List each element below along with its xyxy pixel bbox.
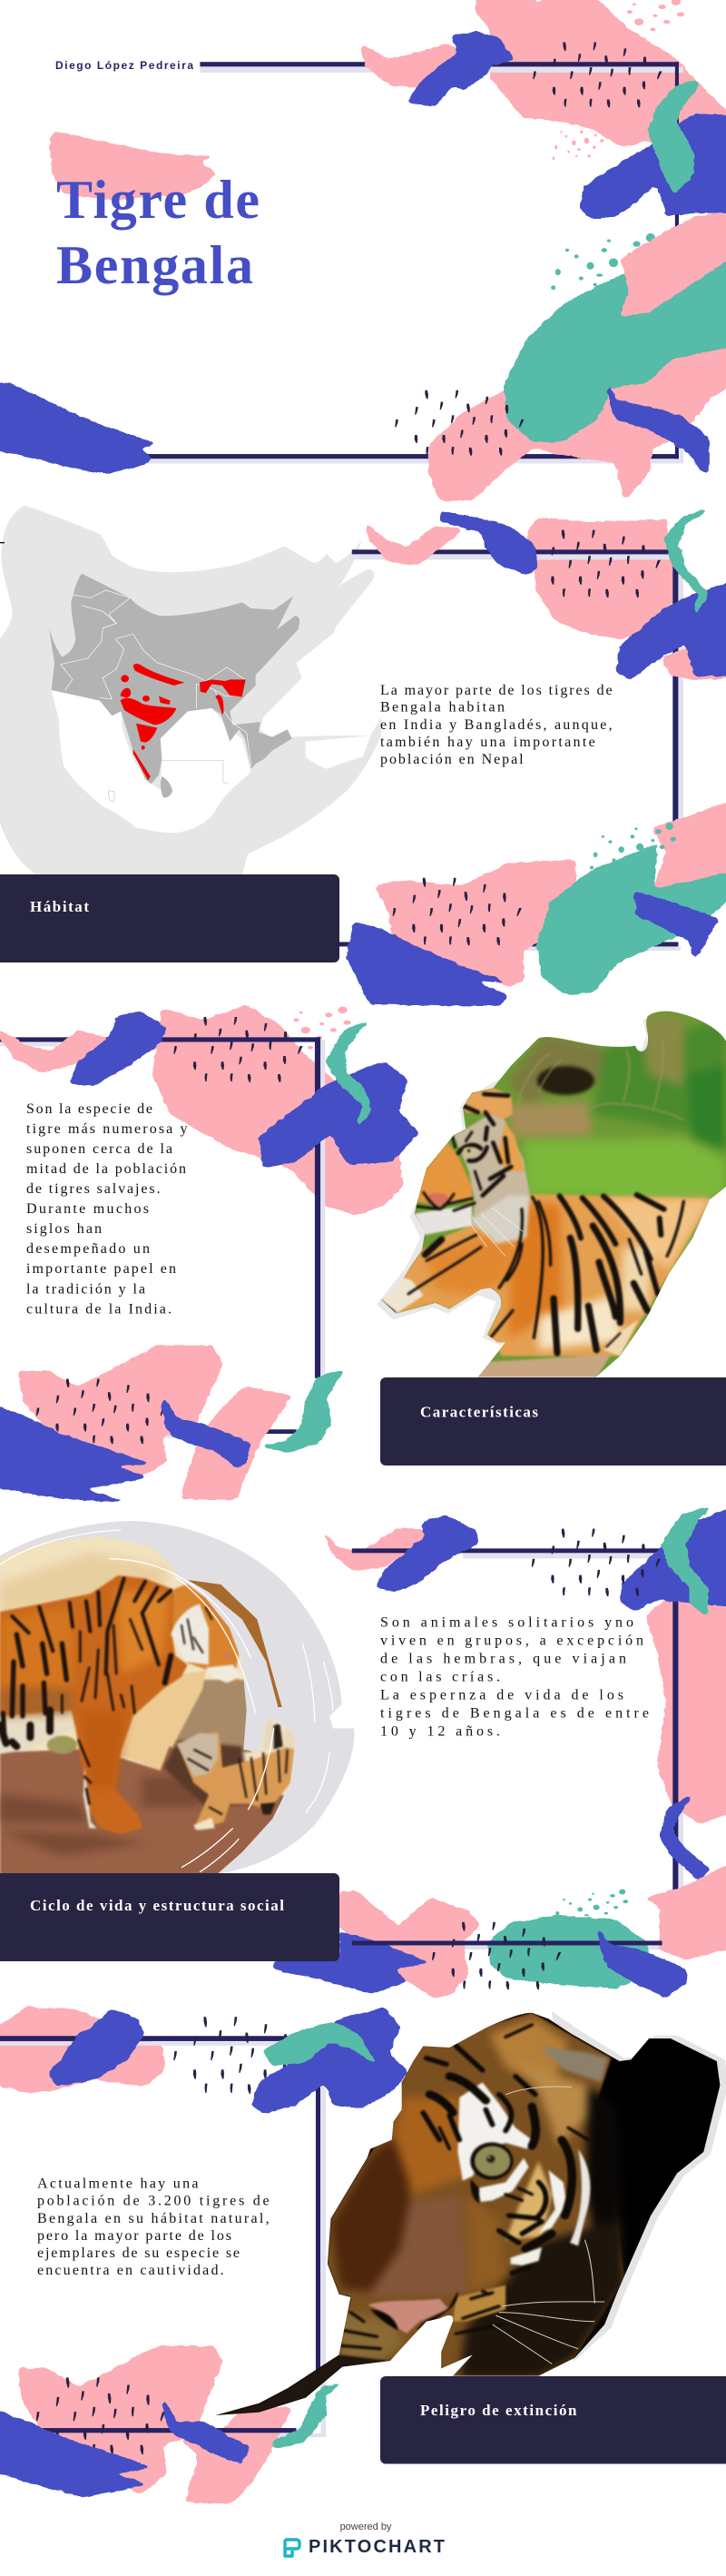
brush: blue tail <box>606 372 709 472</box>
author name: Diego López Pedreira <box>55 59 193 72</box>
brush: green large <box>505 241 726 442</box>
text: life cycle: 10 y 12 años. <box>380 1723 500 1739</box>
footer: powered by: powered by <box>340 2522 392 2532</box>
brush: blue bottom left <box>348 922 512 1006</box>
frame: lines <box>0 2036 326 2437</box>
text: characteristics: importante papel en <box>26 1261 176 1277</box>
brush: pink right <box>646 1586 726 1823</box>
brush: swirl pink <box>360 44 467 87</box>
brush: blue bottom left <box>0 383 157 474</box>
brush: blue tail <box>630 866 718 961</box>
text: life cycle: de las hembras, que viajan <box>380 1651 626 1666</box>
text: characteristics: tigre más numerosa y <box>26 1121 188 1137</box>
text: life cycle: tigres de Bengala es de entre <box>380 1705 649 1721</box>
map: sri lanka <box>161 776 172 798</box>
map: thin maritime lines <box>108 760 229 802</box>
photo shadow <box>539 2011 726 2361</box>
photo: tigress and cub <box>0 1516 354 1880</box>
brush: blue cross <box>260 1061 419 1168</box>
brush: green swirl <box>261 2021 378 2068</box>
pattern: ticks bottom <box>395 390 525 456</box>
photo content <box>0 1516 302 1880</box>
brush: pink lower right <box>181 1387 291 1499</box>
text: characteristics: la tradición y la <box>26 1282 145 1297</box>
frame: bottom line <box>42 2428 297 2433</box>
text: characteristics: de tigres salvajes. <box>26 1181 160 1197</box>
map: tiger range red <box>121 664 246 780</box>
heading box: life cycle <box>0 1873 339 1961</box>
frame: top line <box>200 62 683 231</box>
brush: green <box>260 1369 345 1452</box>
brush: pink top left <box>0 2007 164 2093</box>
brush: green over tusk <box>273 2381 345 2450</box>
brush: pink top <box>528 518 676 639</box>
brush: blue left <box>273 1931 430 1993</box>
text: characteristics: desempeñado un <box>26 1241 150 1257</box>
pattern: ticks top <box>173 1017 303 1082</box>
text: life cycle: Son animales solitarios yno <box>380 1614 633 1631</box>
brush: white streaks <box>0 1530 333 1872</box>
brush: pink bottom <box>339 1891 479 1998</box>
photo content <box>209 2007 726 2431</box>
brush: green stroke <box>662 1505 713 1617</box>
text: life cycle <box>380 1614 649 1739</box>
brush: blue bottom left <box>0 2407 152 2497</box>
map: light surrounding land <box>0 506 381 874</box>
panel: life cycle <box>273 1505 726 1998</box>
brush: swirl pink <box>365 521 463 565</box>
text: endangered: ejemplares de su especie se <box>37 2245 240 2261</box>
splatter: green <box>551 233 659 290</box>
brush: swirl pink <box>0 1029 111 1072</box>
pattern: ticks bottom <box>36 1378 165 1444</box>
map: dark land <box>49 574 299 784</box>
brush: pink top right <box>477 0 726 166</box>
frame: lines <box>0 1037 325 1438</box>
text: habitat: Bengala habitan <box>380 699 505 716</box>
splatter: pink <box>243 1007 351 1051</box>
brush: pink right <box>652 796 726 895</box>
brush: blue cross <box>616 577 726 680</box>
brush: pink over green <box>621 212 726 316</box>
text: life cycle: con las crías. <box>380 1669 500 1684</box>
brush: blue tail <box>162 1393 250 1468</box>
brush: blue tail <box>162 2394 250 2464</box>
heading box: endangered <box>380 2376 726 2464</box>
brush: swirl blue <box>70 1012 167 1086</box>
text: characteristics: suponen cerca de la <box>26 1141 172 1157</box>
brush: pink behind cross <box>662 620 726 680</box>
brush: blue <box>440 511 537 575</box>
brush: green large <box>537 844 726 994</box>
heading box: habitat <box>0 874 339 962</box>
brush: swirl blue <box>407 31 514 106</box>
text: endangered: Actualmente hay una <box>37 2176 198 2192</box>
text: endangered: pero la mayor parte de los <box>37 2228 231 2244</box>
text: habitat: La mayor parte de los tigres de <box>380 683 613 698</box>
brush: pink lower <box>18 1346 222 1477</box>
text: habitat: población en Nepal <box>380 752 524 767</box>
brush: pink bottom right <box>646 1859 726 1959</box>
text: habitat <box>380 683 613 767</box>
heading box: endangered: Peligro de extinción <box>420 2402 577 2419</box>
photo: tiger face close-up <box>209 2007 726 2431</box>
photo: tiger resting on grass <box>375 1002 726 1383</box>
footer: piktochart wordmark: PIKTOCHART <box>309 2537 445 2557</box>
icon: piktochart logo <box>285 2540 299 2556</box>
brush: title pink <box>50 132 218 200</box>
brush: blue bottom left <box>0 1402 152 1502</box>
photo content <box>375 1002 726 1383</box>
brush: tiger sliver beyond arc <box>188 1580 282 1707</box>
heading box: habitat: Hábitat <box>30 898 89 915</box>
brush: blue tail <box>597 1920 688 1998</box>
frame: bottom line <box>339 942 681 951</box>
pattern: ticks bottom <box>393 878 522 945</box>
text: characteristics: cultura de la India. <box>26 1302 172 1317</box>
heading box: characteristics <box>380 1377 726 1466</box>
frame: bottom line <box>352 1940 662 1945</box>
text: characteristics: Durante muchos <box>26 1201 149 1217</box>
pattern: ticks bottom <box>432 1922 561 1989</box>
title: Bengala <box>56 235 253 295</box>
brush: pink lower <box>18 2346 222 2493</box>
text: characteristics: siglos han <box>26 1221 102 1237</box>
heading box: characteristics: Características <box>420 1404 538 1420</box>
pattern: ticks top <box>532 530 661 597</box>
panel: endangered <box>0 2007 407 2502</box>
brush: pink lower right <box>428 312 726 500</box>
text: habitat: en India y Bangladés, aunque, <box>380 717 613 733</box>
text: characteristics <box>26 1101 188 1317</box>
frame: lines <box>352 1548 683 1949</box>
brush: pink lower right <box>181 2407 291 2502</box>
brush: green stroke <box>648 80 699 195</box>
pattern: ticks top <box>533 42 662 107</box>
splatter: green <box>590 823 676 870</box>
frame: right line <box>672 1584 678 1893</box>
splatter: pink lower <box>553 120 612 160</box>
pattern: ticks bottom <box>36 2377 165 2454</box>
text: life cycle: La espernza de vida de los <box>380 1687 623 1703</box>
map: small tick <box>0 542 5 543</box>
frame: bottom line <box>139 344 683 463</box>
splatter: pink <box>576 0 684 44</box>
brush: green oval <box>488 1916 648 1989</box>
title: Tigre de <box>56 170 260 230</box>
pattern: ticks top <box>532 1529 661 1596</box>
panel: habitat <box>339 507 726 1006</box>
brush: swirl pink <box>319 1526 436 1570</box>
map: ocean <box>52 690 251 833</box>
brush: green stroke <box>664 507 713 618</box>
panel: cover <box>0 0 726 500</box>
brush: grey ring around photo <box>0 1521 354 1874</box>
brush: green stroke <box>327 1018 375 1131</box>
brush: blue top right <box>621 1505 726 1611</box>
brush: pink large <box>152 1005 403 1215</box>
brush: blue cross <box>581 114 726 219</box>
text: endangered: población de 3.200 tigres de <box>37 2194 270 2209</box>
brush: swirl blue <box>375 1515 477 1591</box>
photo shadow <box>377 1019 683 1346</box>
text: endangered <box>37 2176 270 2278</box>
map: eastern ocean notch <box>306 735 370 769</box>
brush: blue top <box>49 2008 143 2086</box>
text: characteristics: mitad de la población <box>26 1161 186 1177</box>
frame: top and right lines <box>352 549 683 835</box>
text: life cycle: viven en grupos, a excepción <box>380 1633 643 1648</box>
text: endangered: Bengala en su hábitat natural, <box>37 2211 270 2226</box>
text: habitat: también hay una importante <box>380 735 595 750</box>
pattern: ticks top <box>173 2017 303 2094</box>
title <box>56 170 260 295</box>
brush: blue cross <box>252 2008 407 2114</box>
splatter: green <box>553 1890 628 1924</box>
brush: pink lower left <box>375 860 576 986</box>
brush: blue right lower <box>660 1791 709 1881</box>
map: bengal tiger distribution <box>0 506 381 874</box>
heading box: life cycle: Ciclo de vida y estructura social <box>30 1897 284 1914</box>
text: characteristics: Son la especie de <box>26 1101 152 1117</box>
text: endangered: encuentra en cautividad. <box>37 2263 224 2278</box>
map: border lines <box>61 590 251 765</box>
panel: characteristics <box>0 1005 419 1502</box>
brush: grey arc <box>209 1592 278 1713</box>
